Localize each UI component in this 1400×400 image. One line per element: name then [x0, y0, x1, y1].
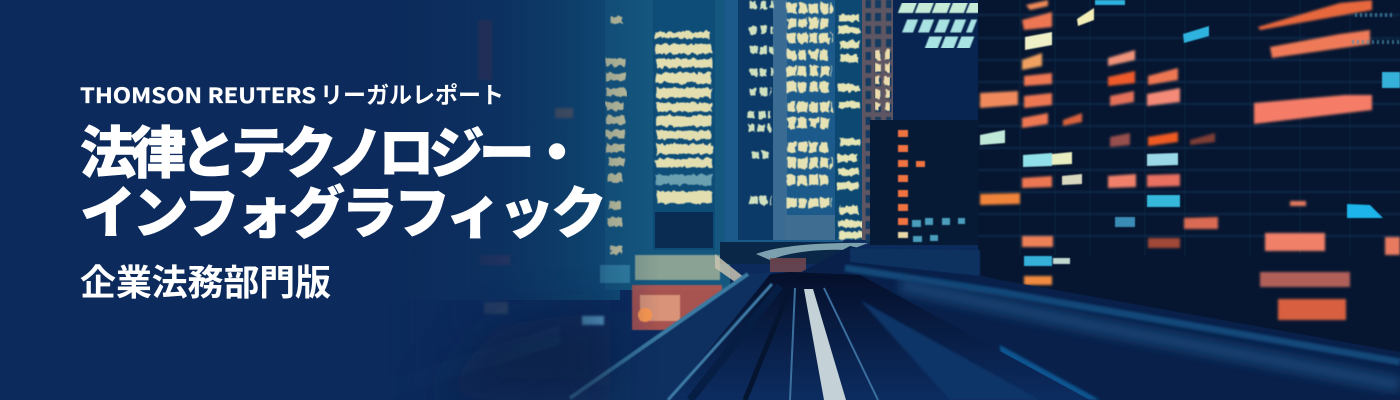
title [80, 109, 607, 250]
title: インフォグラフィック [80, 169, 607, 250]
right retaining wall [790, 246, 1400, 400]
rail tracks [565, 272, 1090, 400]
buildings left [600, 0, 730, 330]
far-left building windows [606, 20, 626, 250]
subtitle: 企業法務部門版 [80, 254, 331, 306]
center white line [804, 289, 846, 400]
cyan and cream windows [980, 0, 1400, 266]
title: 法律とテクノロジー・ [80, 109, 585, 190]
kicker [80, 76, 504, 110]
speckled pillar [636, 0, 652, 275]
text block [80, 76, 607, 306]
elevated track curve [715, 242, 868, 284]
stripe windows [656, 35, 712, 197]
central towers [725, 0, 843, 250]
right building with blurred windows [978, 0, 1400, 370]
cyan-cream windows [900, 7, 988, 44]
dark shadow at lower middle [430, 310, 610, 400]
kicker: リーガルレポート [320, 76, 504, 110]
lower city lights [600, 255, 722, 330]
orange windows [980, 0, 1400, 320]
kicker: THOMSON REUTERS [80, 80, 316, 110]
mid towers [835, 0, 988, 245]
left fade overlay [0, 0, 660, 400]
distant lights behind the title [340, 20, 604, 400]
